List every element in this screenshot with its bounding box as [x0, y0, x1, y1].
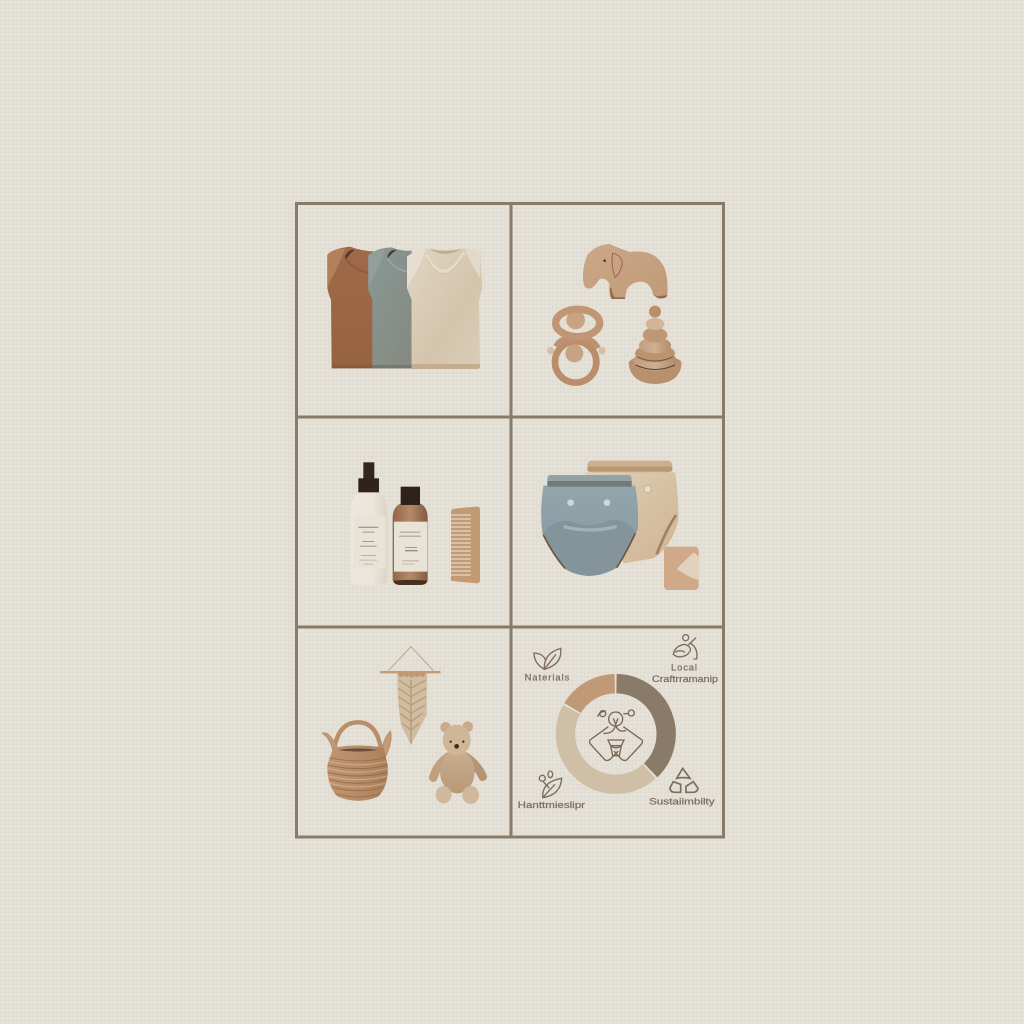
wooden elephant — [583, 244, 668, 299]
panel: woven decor — [323, 647, 483, 804]
label: local craftsmanship: Craftrramanip — [652, 674, 718, 684]
wooden rattle — [547, 309, 606, 383]
icon: hands holding sprout — [589, 710, 643, 760]
knitted teddy bear — [433, 721, 483, 804]
wooden ring stacker — [629, 306, 682, 384]
label: handmade: Hanttmieslipr — [518, 800, 585, 810]
label: local craftsmanship: Local — [671, 663, 697, 673]
grid frame — [296, 203, 724, 837]
rust bodysuit — [327, 247, 375, 368]
panel: cloth diapers — [541, 461, 699, 590]
panel: bodysuits — [327, 247, 482, 369]
label: sustainability: Sustaiimbilty — [649, 796, 715, 806]
blue diaper — [541, 475, 638, 576]
panel: wooden toys — [547, 244, 682, 384]
icon: craft hand and tool — [673, 635, 697, 659]
wooden comb — [451, 507, 480, 583]
spray bottle — [351, 462, 387, 585]
label: local craftsmanship — [652, 663, 718, 684]
panel: care products — [351, 462, 480, 585]
folded cloth swatch — [664, 547, 699, 590]
donut chart — [565, 684, 666, 784]
panel: values donut and labels — [518, 635, 718, 810]
sage bodysuit — [368, 247, 412, 368]
cream bodysuit — [407, 248, 482, 369]
label: materials: Naterials — [525, 673, 570, 683]
woven basket — [323, 722, 391, 801]
icon: recycle arrows — [670, 768, 698, 792]
icon: leaf and seeds — [539, 771, 562, 798]
macrame wall hanging — [380, 647, 441, 745]
beige diaper — [585, 461, 678, 563]
amber bottle — [393, 487, 428, 585]
icon: leaf, materials — [534, 648, 561, 669]
